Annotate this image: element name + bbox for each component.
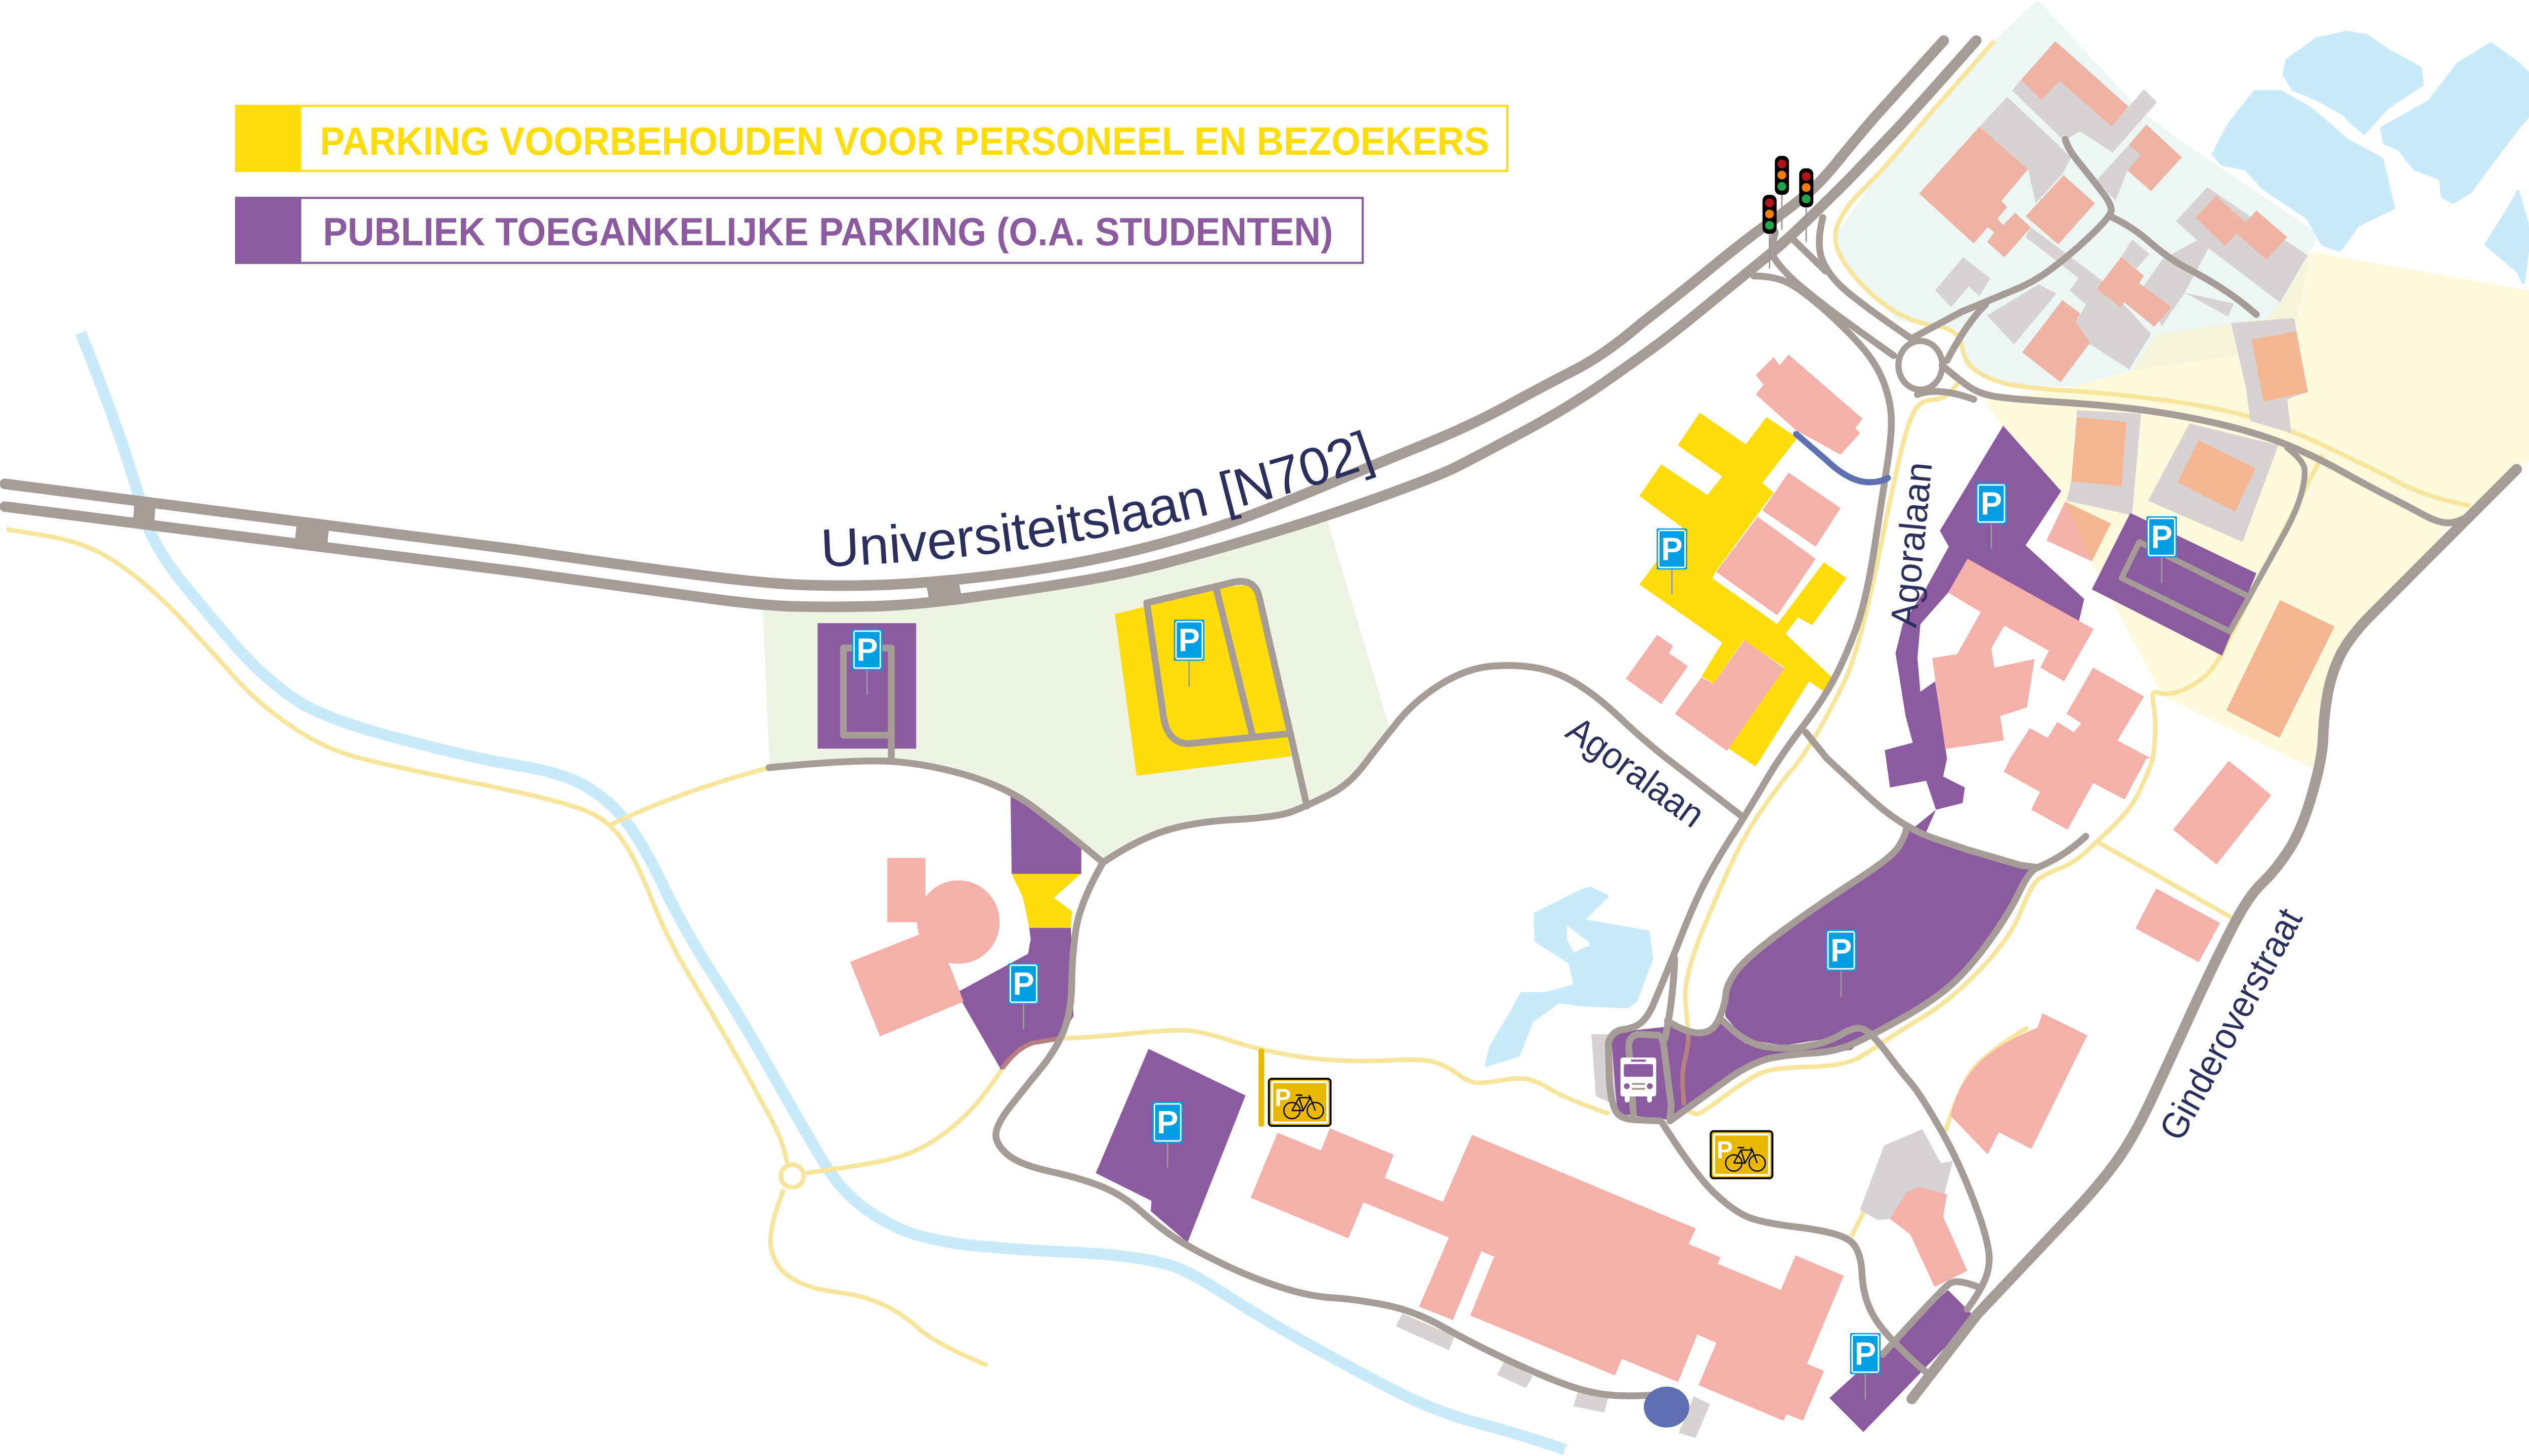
parking sign C [1008, 963, 1039, 1029]
legend: staff parking [235, 105, 1507, 172]
bicycle parking sign east: P [1717, 1136, 1733, 1164]
traffic light 1 [1775, 156, 1789, 230]
parking sign D: P [1157, 1105, 1179, 1140]
parking sign I [2147, 516, 2177, 583]
zone: green area [762, 518, 1389, 862]
road label: Agoralaan north: Agoralaan [1883, 460, 1940, 629]
bicycle parking sign west [1269, 1079, 1331, 1126]
parking sign G: P [1661, 531, 1683, 567]
parking sign A: P [856, 632, 878, 668]
brown cycle path over parking [1002, 1029, 1688, 1106]
buildings: pink [850, 355, 2271, 1421]
zone: light yellow area [1984, 252, 2529, 771]
legend: staff parking: PARKING VOORBEHOUDEN VOOR PERSONEEL EN BEZOEKERS [320, 119, 1489, 163]
legend: public parking [235, 197, 1363, 264]
parking sign H: P [1981, 486, 2002, 521]
zone overlap [2133, 252, 2310, 370]
parking sign E: P [1830, 933, 1852, 968]
road: Universiteitslaan N702 [5, 40, 1976, 607]
buildings: grey service areas [1396, 80, 2308, 1438]
lakes [1487, 32, 2529, 1065]
buildings: top right campus [1919, 41, 2287, 382]
parking sign G [1656, 528, 1687, 594]
parking: purple public zones [817, 426, 2256, 1432]
legend: public parking: PUBLIEK TOEGANKELIJKE PARKING (O.A. STUDENTEN) [323, 209, 1333, 254]
buildings: orange in yellow zone [2065, 331, 2334, 738]
parking sign D [1152, 1102, 1183, 1167]
traffic light 3 [1763, 195, 1777, 269]
road: Ginderoverstraat [1912, 469, 2517, 1399]
bicycle parking sign east [1711, 1131, 1772, 1178]
road label: Universiteitslaan: Universiteitslaan [N702] [824, 430, 1377, 566]
parking sign B: P [1179, 623, 1200, 658]
parking sign A [852, 629, 883, 695]
parking sign I: P [2151, 519, 2172, 555]
zone: mint area [1835, 0, 2320, 386]
roads: campus network [769, 139, 2470, 1396]
parking sign B [1174, 620, 1204, 687]
parking sign H [1976, 483, 2007, 549]
parking: yellow staff zones [1012, 413, 1846, 1127]
parking sign F: P [1855, 1336, 1876, 1372]
road label: Agoralaan south: Agoralaan [1559, 708, 1713, 835]
road: blue access [1796, 434, 1888, 482]
bicycle parking sign west: P [1275, 1084, 1291, 1111]
parking sign F [1850, 1333, 1881, 1399]
river [81, 333, 1565, 1449]
road label: Ginderoverstraat: Ginderoverstraat [2151, 901, 2310, 1147]
blue marker [1644, 1387, 1689, 1428]
bus stop icon [1621, 1057, 1656, 1102]
traffic light 2 [1799, 168, 1813, 242]
parking sign C: P [1013, 966, 1034, 1002]
parking sign E [1826, 930, 1856, 997]
